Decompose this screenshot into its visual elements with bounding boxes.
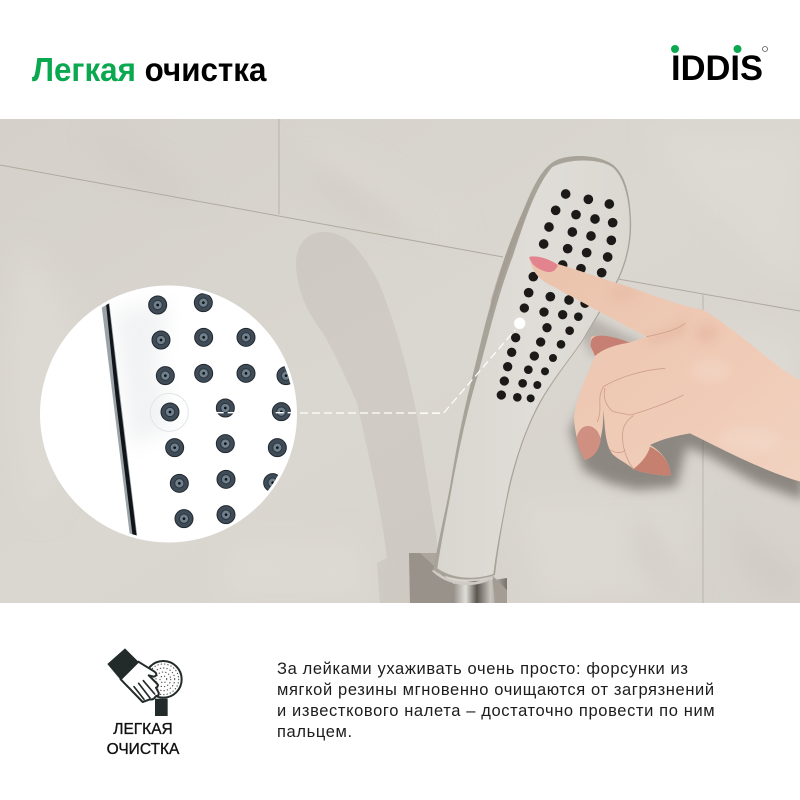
hotspot dot	[514, 318, 525, 329]
highlight ring	[150, 393, 188, 431]
nozzles	[497, 189, 617, 402]
wall pattern	[7, 130, 800, 600]
chrome edge	[102, 303, 137, 537]
icon spray holes	[148, 664, 179, 695]
shower head	[433, 156, 631, 580]
icon cuff	[107, 648, 138, 680]
hand shadow	[565, 406, 800, 504]
nozzle close-ups	[149, 294, 295, 528]
icon label	[107, 721, 180, 758]
hand	[529, 256, 800, 482]
icon: hand cleaning shower head	[107, 648, 182, 716]
shower shadow reflection	[296, 232, 437, 603]
description text: За лейками ухаживать очень просто: форсунки из	[277, 660, 689, 678]
tile joints	[0, 119, 800, 603]
dashed connector to hotspot	[420, 330, 515, 413]
logo: IDDIS: IDDIS	[671, 49, 763, 88]
icon shower head disc	[145, 661, 182, 698]
description text: пальцем.	[277, 723, 353, 741]
finger creases	[597, 323, 685, 469]
photo panel: shower head on tiled wall	[0, 119, 800, 716]
icon hand	[121, 662, 159, 702]
title: Легкая очистка	[32, 51, 266, 88]
icon shower handle	[155, 699, 168, 716]
icon label: ЛЕГКАЯ	[113, 721, 173, 738]
nails	[529, 256, 558, 272]
wall mount bracket	[409, 553, 507, 603]
zoom lens: nozzle close-up	[40, 286, 297, 542]
description text	[277, 660, 715, 741]
description text: мягкой резины мгновенно очищаются от загрязнений	[277, 681, 715, 699]
icon label: ОЧИСТКА	[107, 740, 179, 758]
dashed connector	[192, 412, 443, 414]
description text: и известкового налета – достаточно провести по ним	[277, 702, 715, 720]
